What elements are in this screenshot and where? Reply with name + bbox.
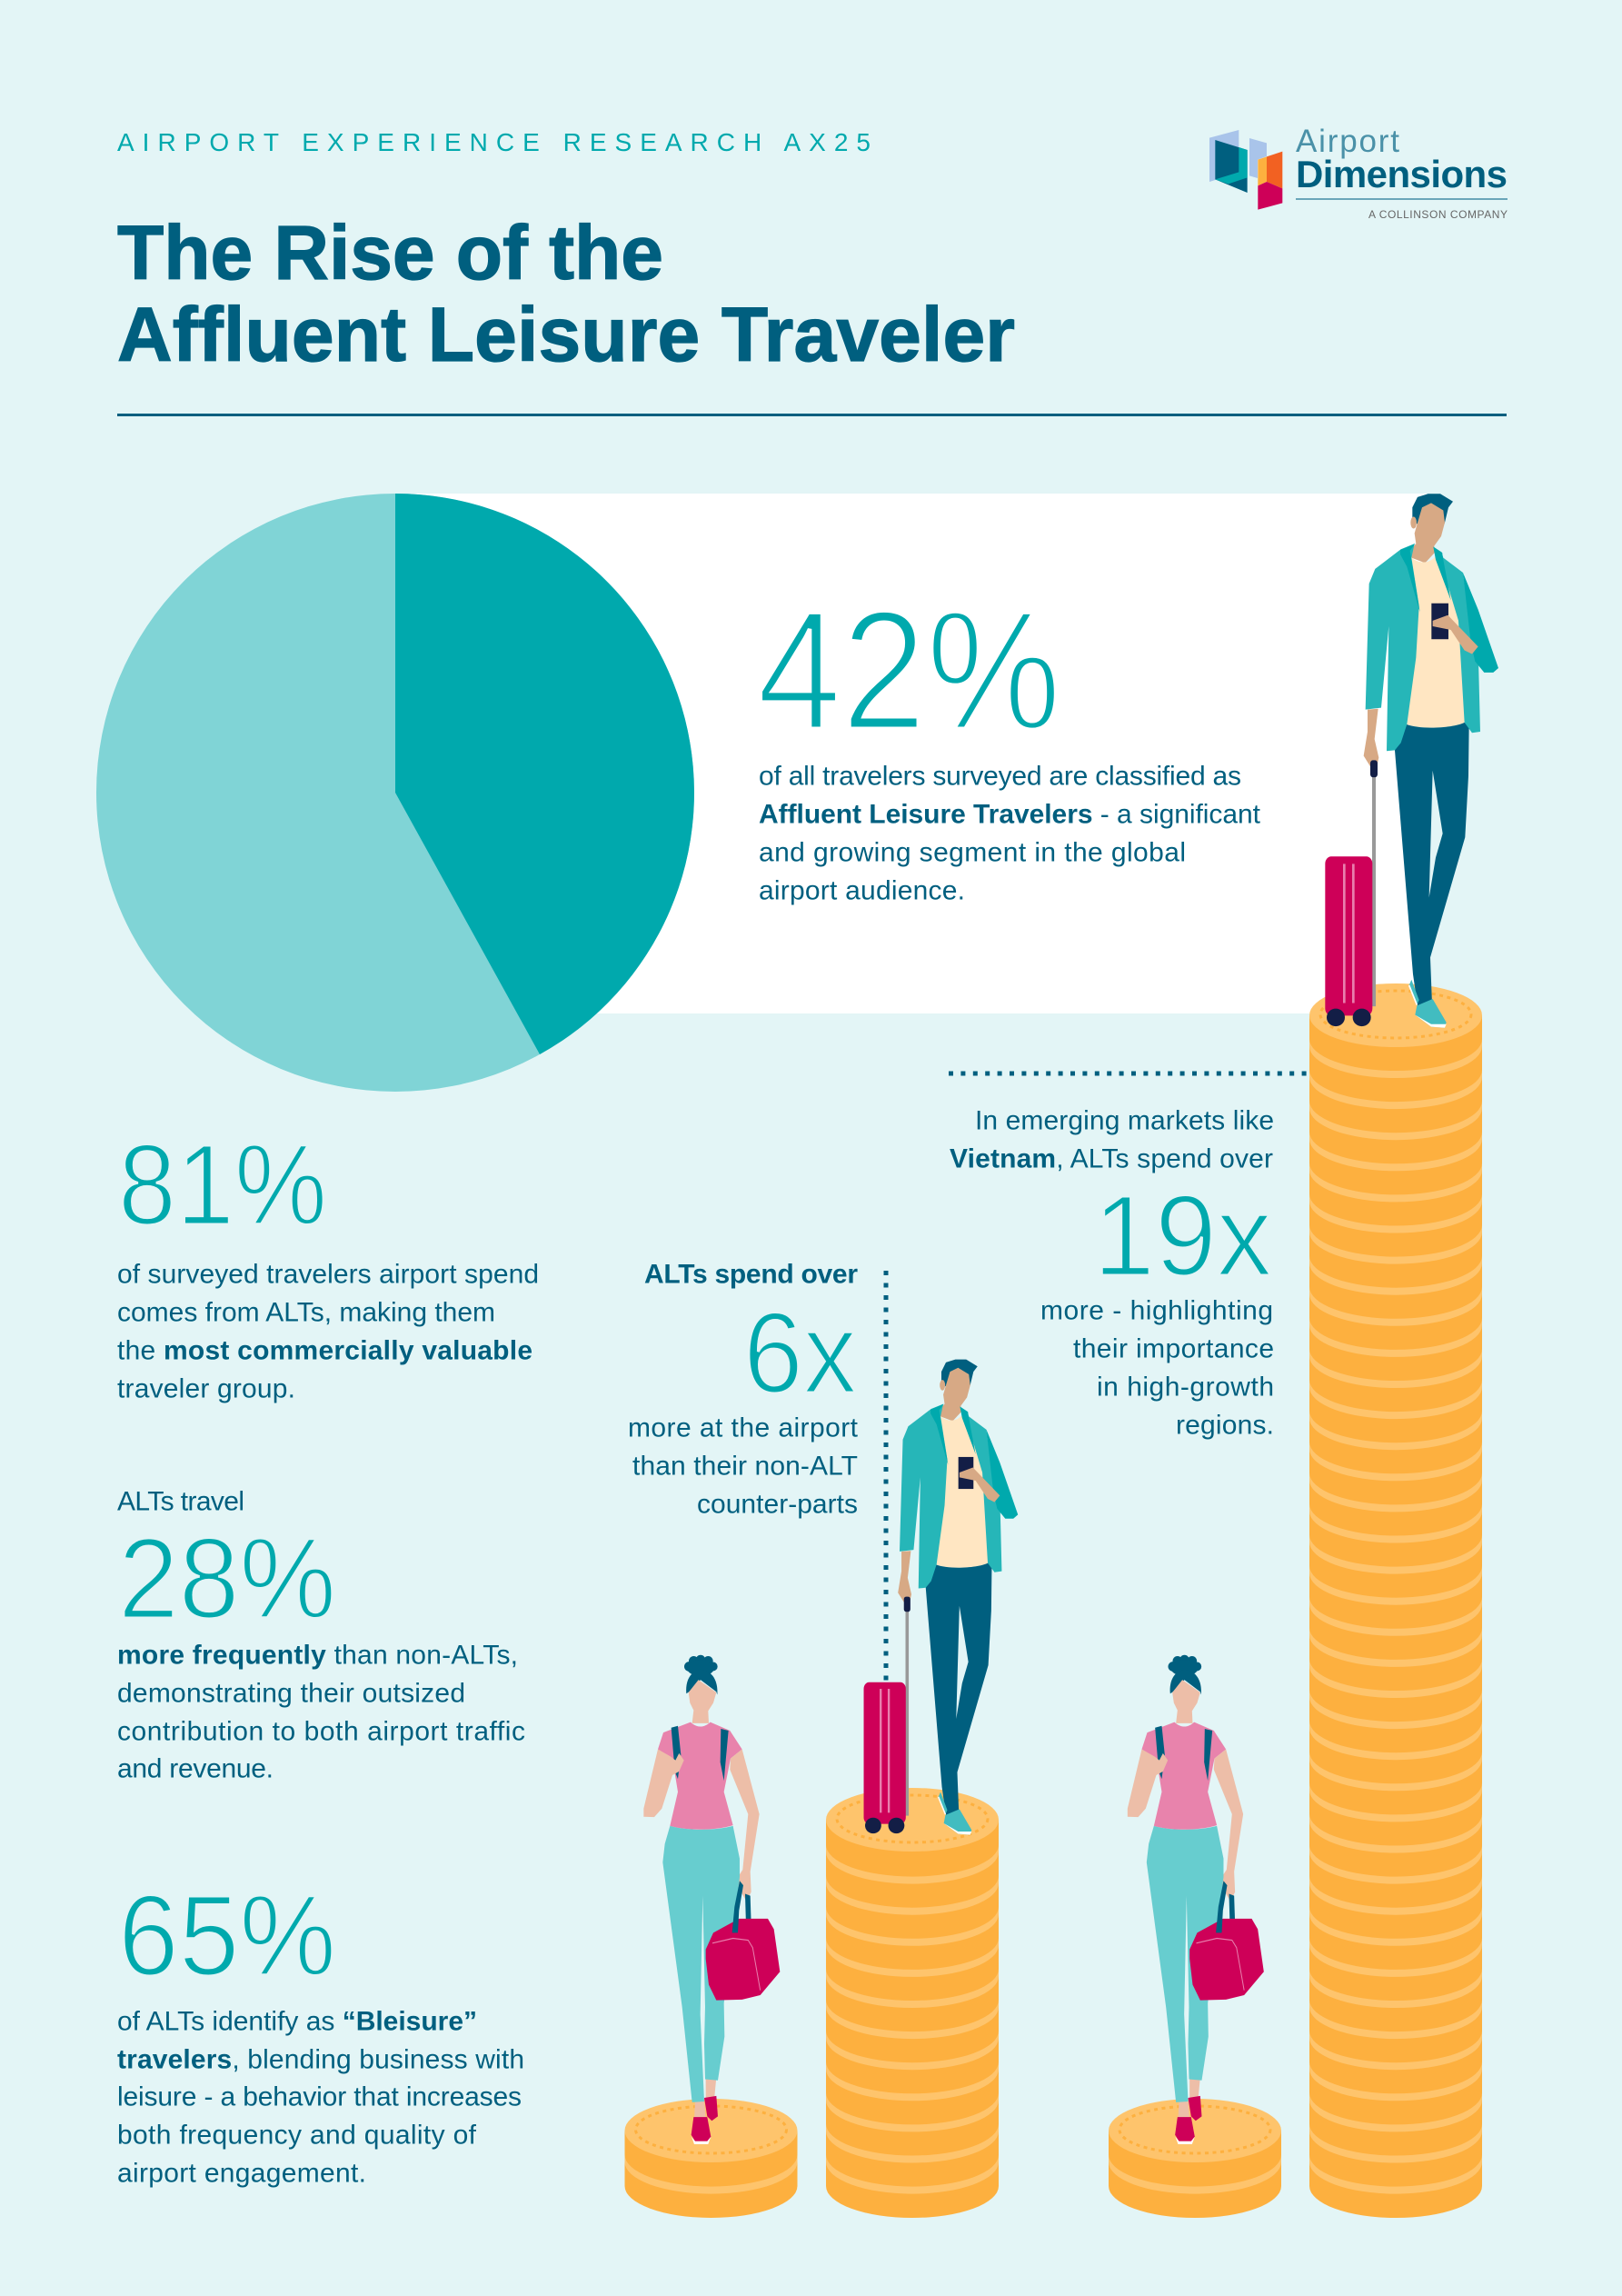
stat: 65%: of ALTs identify as “Bleisure” — [117, 2007, 477, 2036]
title: Affluent Leisure Traveler — [117, 292, 1015, 377]
stat: 6x — [628, 1260, 859, 1520]
figure: female traveler with bag, right — [1128, 1655, 1264, 2144]
stat: 42%: airport audience. — [759, 876, 965, 905]
stat: 42%: and growing segment in the global — [759, 838, 1186, 867]
stat: 28%: contribution to both airport traffic — [117, 1716, 525, 1747]
stat: 65%: leisure - a behavior that increases — [117, 2081, 522, 2112]
stat: 42%: of all travelers surveyed are classified as — [759, 762, 1241, 791]
stat: 19x — [950, 1105, 1274, 1440]
logo: Airport Dimensions — [1209, 124, 1508, 221]
stat: 65%: travelers, blending business with — [117, 2045, 524, 2074]
stat: 81%: the most commercially valuable — [117, 1336, 532, 1365]
stat: 6x: ALTs spend over — [644, 1260, 858, 1289]
stat: 19x: Vietnam, ALTs spend over — [950, 1143, 1273, 1174]
stat: 42% — [757, 575, 1261, 905]
stat: 81%: of surveyed travelers airport spend — [117, 1260, 539, 1289]
stat: 81% — [117, 1121, 539, 1403]
stat: 81%: traveler group. — [117, 1374, 295, 1403]
stat: 28%: and revenue. — [117, 1754, 274, 1783]
stat: 19x: their importance — [1073, 1334, 1274, 1363]
stat: 65%: both frequency and quality of — [117, 2120, 477, 2151]
logo: Airport Dimensions: Dimensions — [1296, 153, 1508, 195]
stat: 6x: than their non-ALT — [632, 1451, 858, 1482]
figure: female traveler with bag, left — [643, 1655, 780, 2144]
stat: 65%: airport engagement. — [117, 2158, 366, 2189]
eyebrow heading: AIRPORT EXPERIENCE RESEARCH AX25 — [117, 128, 871, 156]
panel: white band behind 42% stat — [395, 494, 1427, 1013]
stat: 19x: In emerging markets like — [975, 1105, 1274, 1136]
stat: 28%: more frequently than non-ALTs, — [117, 1640, 518, 1671]
stat: 6x: counter-parts — [697, 1489, 858, 1520]
stat: 28%: demonstrating their outsized — [117, 1678, 465, 1709]
logo: Airport Dimensions: A COLLINSON COMPANY — [1368, 208, 1508, 221]
logo: Airport Dimensions: Airport — [1296, 124, 1399, 159]
stat: 81%: comes from ALTs, making them — [117, 1298, 495, 1327]
stat: 28%: ALTs travel — [117, 1487, 244, 1516]
stat: 42%: 42% — [757, 575, 1061, 765]
pie chart: 42% of travelers — [96, 494, 694, 1092]
coin stack: medium 6x — [826, 1788, 999, 2218]
title: The Rise of the — [117, 210, 663, 295]
stat: 19x: 19x — [1093, 1172, 1272, 1300]
stat: 19x: in high-growth — [1097, 1373, 1274, 1402]
coin stack: tall 19x — [1309, 983, 1482, 2218]
figure: male traveler with suitcase, top — [1325, 494, 1498, 1028]
stat: 42%: Affluent Leisure Travelers - a significant — [759, 800, 1261, 829]
stat: 65% — [117, 1872, 524, 2189]
stat: 28%: 28% — [118, 1514, 336, 1642]
coin stack: small left — [625, 2099, 798, 2218]
coin stack: small right — [1109, 2099, 1281, 2218]
stat: 28% — [117, 1487, 525, 1783]
title — [117, 210, 1015, 377]
stat: 19x: more - highlighting — [1040, 1296, 1273, 1325]
stat: 65%: 65% — [118, 1872, 336, 2000]
stat: 6x: more at the airport — [628, 1413, 859, 1443]
stat: 81%: 81% — [118, 1121, 327, 1249]
stat: 6x: 6x — [743, 1289, 857, 1417]
stat: 19x: regions. — [1176, 1411, 1274, 1440]
figure: male traveler with suitcase, middle — [864, 1360, 1018, 1835]
